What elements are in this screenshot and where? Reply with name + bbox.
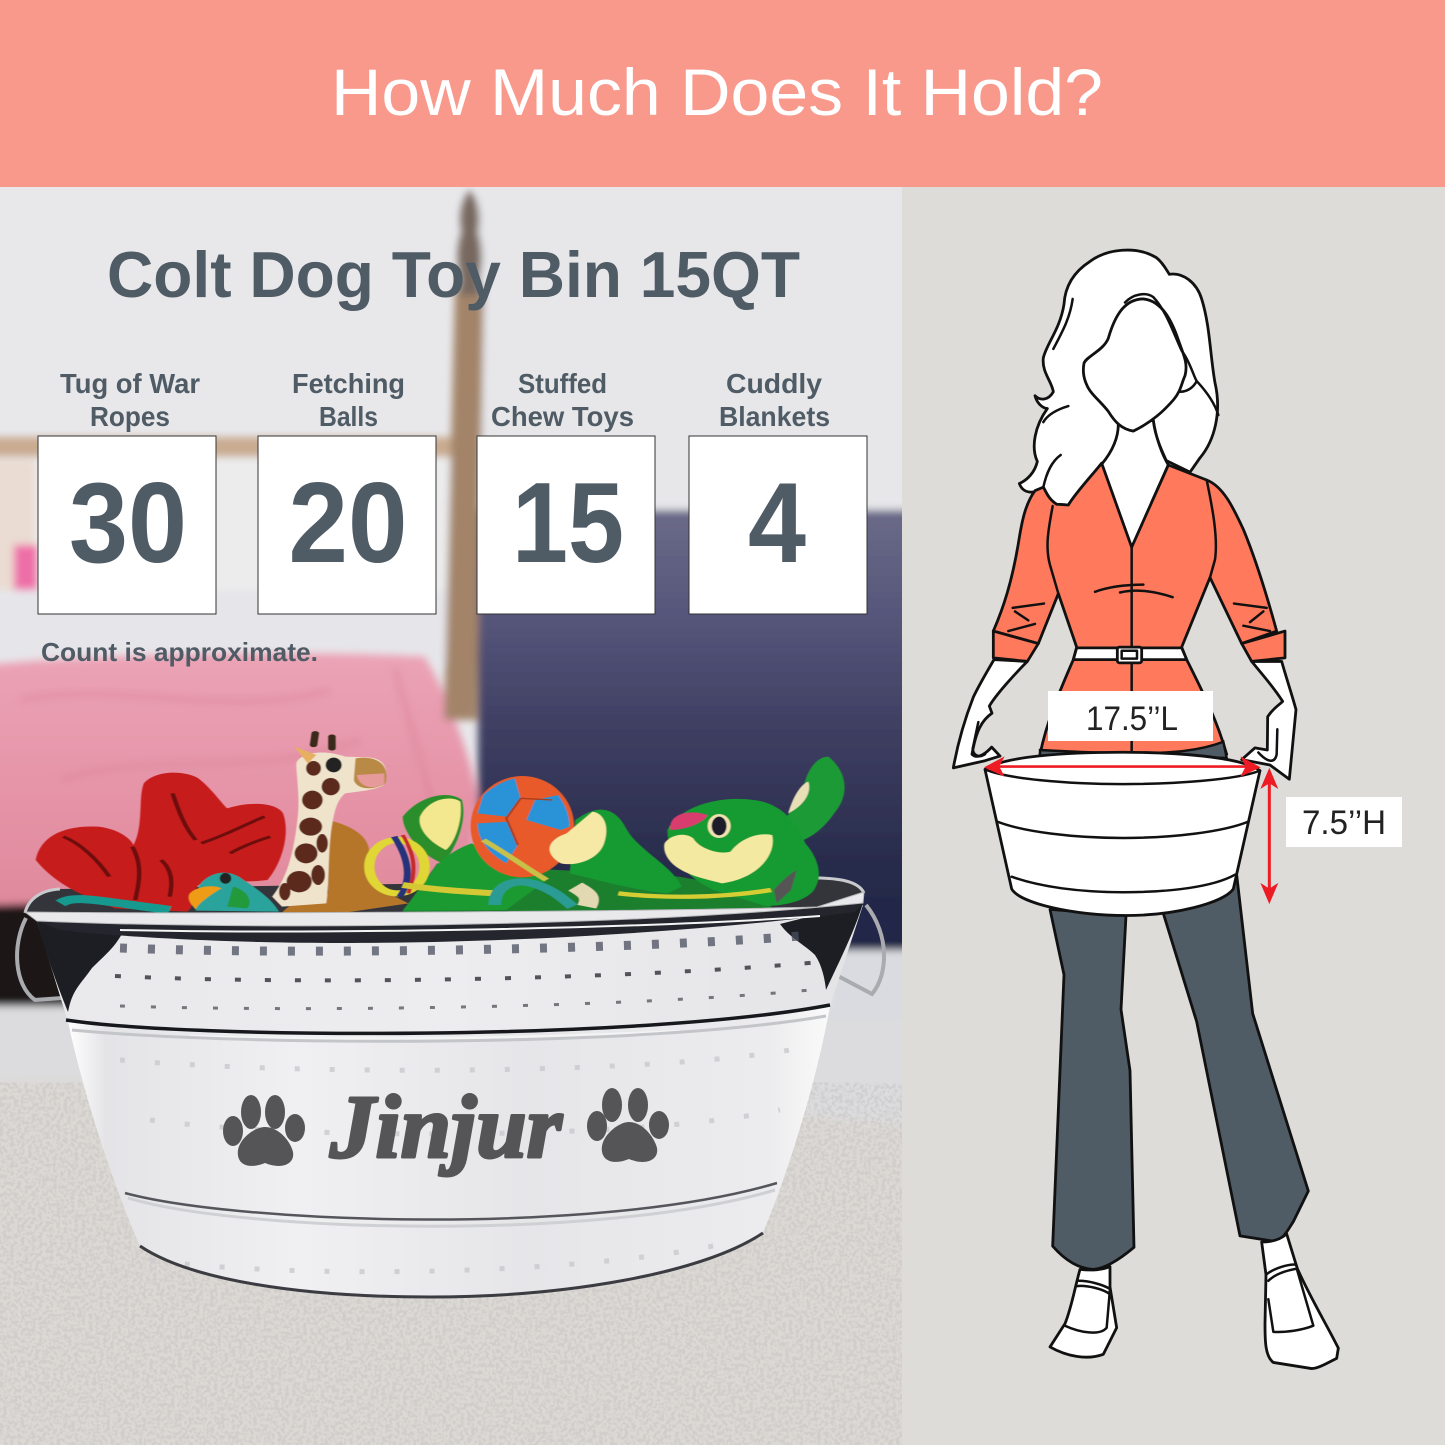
dark reflection corners <box>37 903 863 1012</box>
illustration: woman holding bin, upper body <box>953 250 1296 779</box>
arrow: height <box>1260 768 1278 904</box>
toy: green filler and rope bed <box>403 863 771 912</box>
card: tug of war ropes count: Ropes <box>90 401 170 432</box>
toy: red rope blanket <box>36 773 286 912</box>
rug texture <box>0 1083 902 1445</box>
toy: blue and orange ball <box>471 776 574 877</box>
face <box>1083 299 1186 431</box>
belt <box>1073 647 1187 663</box>
bin upper hammered band <box>37 905 863 1034</box>
bin outline <box>985 752 1260 916</box>
bin dark rim band <box>37 903 863 943</box>
blouse seams <box>1008 480 1270 754</box>
footnote: Count is approximate. <box>41 637 318 667</box>
label: length <box>1048 691 1213 741</box>
toy: teal rope <box>60 899 170 910</box>
neck <box>1102 420 1168 547</box>
shoe left <box>1050 1267 1117 1357</box>
engraved paw right <box>587 1088 669 1162</box>
toy: green cat <box>664 757 845 906</box>
shoe right <box>1262 1234 1338 1369</box>
blouse cuffs <box>993 631 1285 661</box>
label: length: 17.5’’L <box>1086 700 1178 738</box>
panel: right side figure background <box>902 187 1445 1445</box>
card: fetching balls count: Balls <box>319 401 378 432</box>
card: stuffed chew toys count: Stuffed <box>518 368 607 399</box>
tank top <box>1115 500 1152 547</box>
hair details <box>1043 294 1218 487</box>
card: cuddly blankets count: Blankets <box>719 401 830 432</box>
card: tug of war ropes count: Tug of War <box>60 368 200 399</box>
product photo: toys <box>36 733 845 913</box>
dimple rows <box>115 936 820 1272</box>
card: cuddly blankets count <box>689 368 867 614</box>
toy: yellow rope knots <box>369 835 771 907</box>
card: stuffed chew toys count: Chew Toys <box>491 401 634 432</box>
card: tug of war ropes count <box>38 368 216 614</box>
product name heading: Colt Dog Toy Bin 15QT <box>107 238 800 311</box>
bin lower body <box>68 1006 830 1297</box>
toy: green plush with yellow feet <box>403 795 547 911</box>
toy: parrot <box>189 873 279 912</box>
engraved name: Jinjur <box>329 1078 563 1177</box>
bin front rim <box>25 892 864 926</box>
panel: bedroom photo background <box>0 177 920 1445</box>
toy: green plush leg <box>550 810 682 893</box>
bin handles <box>17 905 884 1000</box>
label: height: 7.5’’H <box>1302 804 1386 842</box>
card: tug of war ropes count: 30 <box>69 460 187 587</box>
toy: brown plush <box>282 820 408 913</box>
pants <box>1050 909 1134 1269</box>
arm right <box>1242 661 1296 779</box>
blouse <box>993 463 1277 754</box>
illustration: woman lower body <box>984 752 1338 1369</box>
bin seams <box>66 1005 830 1033</box>
card: fetching balls count: Fetching <box>292 368 405 399</box>
title: How Much Does It Hold? <box>331 55 1103 129</box>
card: fetching balls count: 20 <box>288 460 408 587</box>
bin back rim and interior <box>25 878 864 920</box>
card: cuddly blankets count: 4 <box>748 460 806 587</box>
arm left <box>953 660 1027 768</box>
header banner <box>0 0 1445 187</box>
card: stuffed chew toys count <box>477 368 655 614</box>
label: height <box>1286 797 1402 847</box>
product photo: metal bin <box>17 892 884 1297</box>
arrow: length <box>984 756 1261 777</box>
engraved paw left <box>223 1095 305 1166</box>
hair <box>1019 250 1218 505</box>
card: cuddly blankets count: Cuddly <box>726 368 822 399</box>
toy: giraffe <box>272 733 387 907</box>
card: fetching balls count <box>258 368 436 614</box>
card: stuffed chew toys count: 15 <box>512 460 624 587</box>
waist shadow pants top <box>1040 742 1227 758</box>
